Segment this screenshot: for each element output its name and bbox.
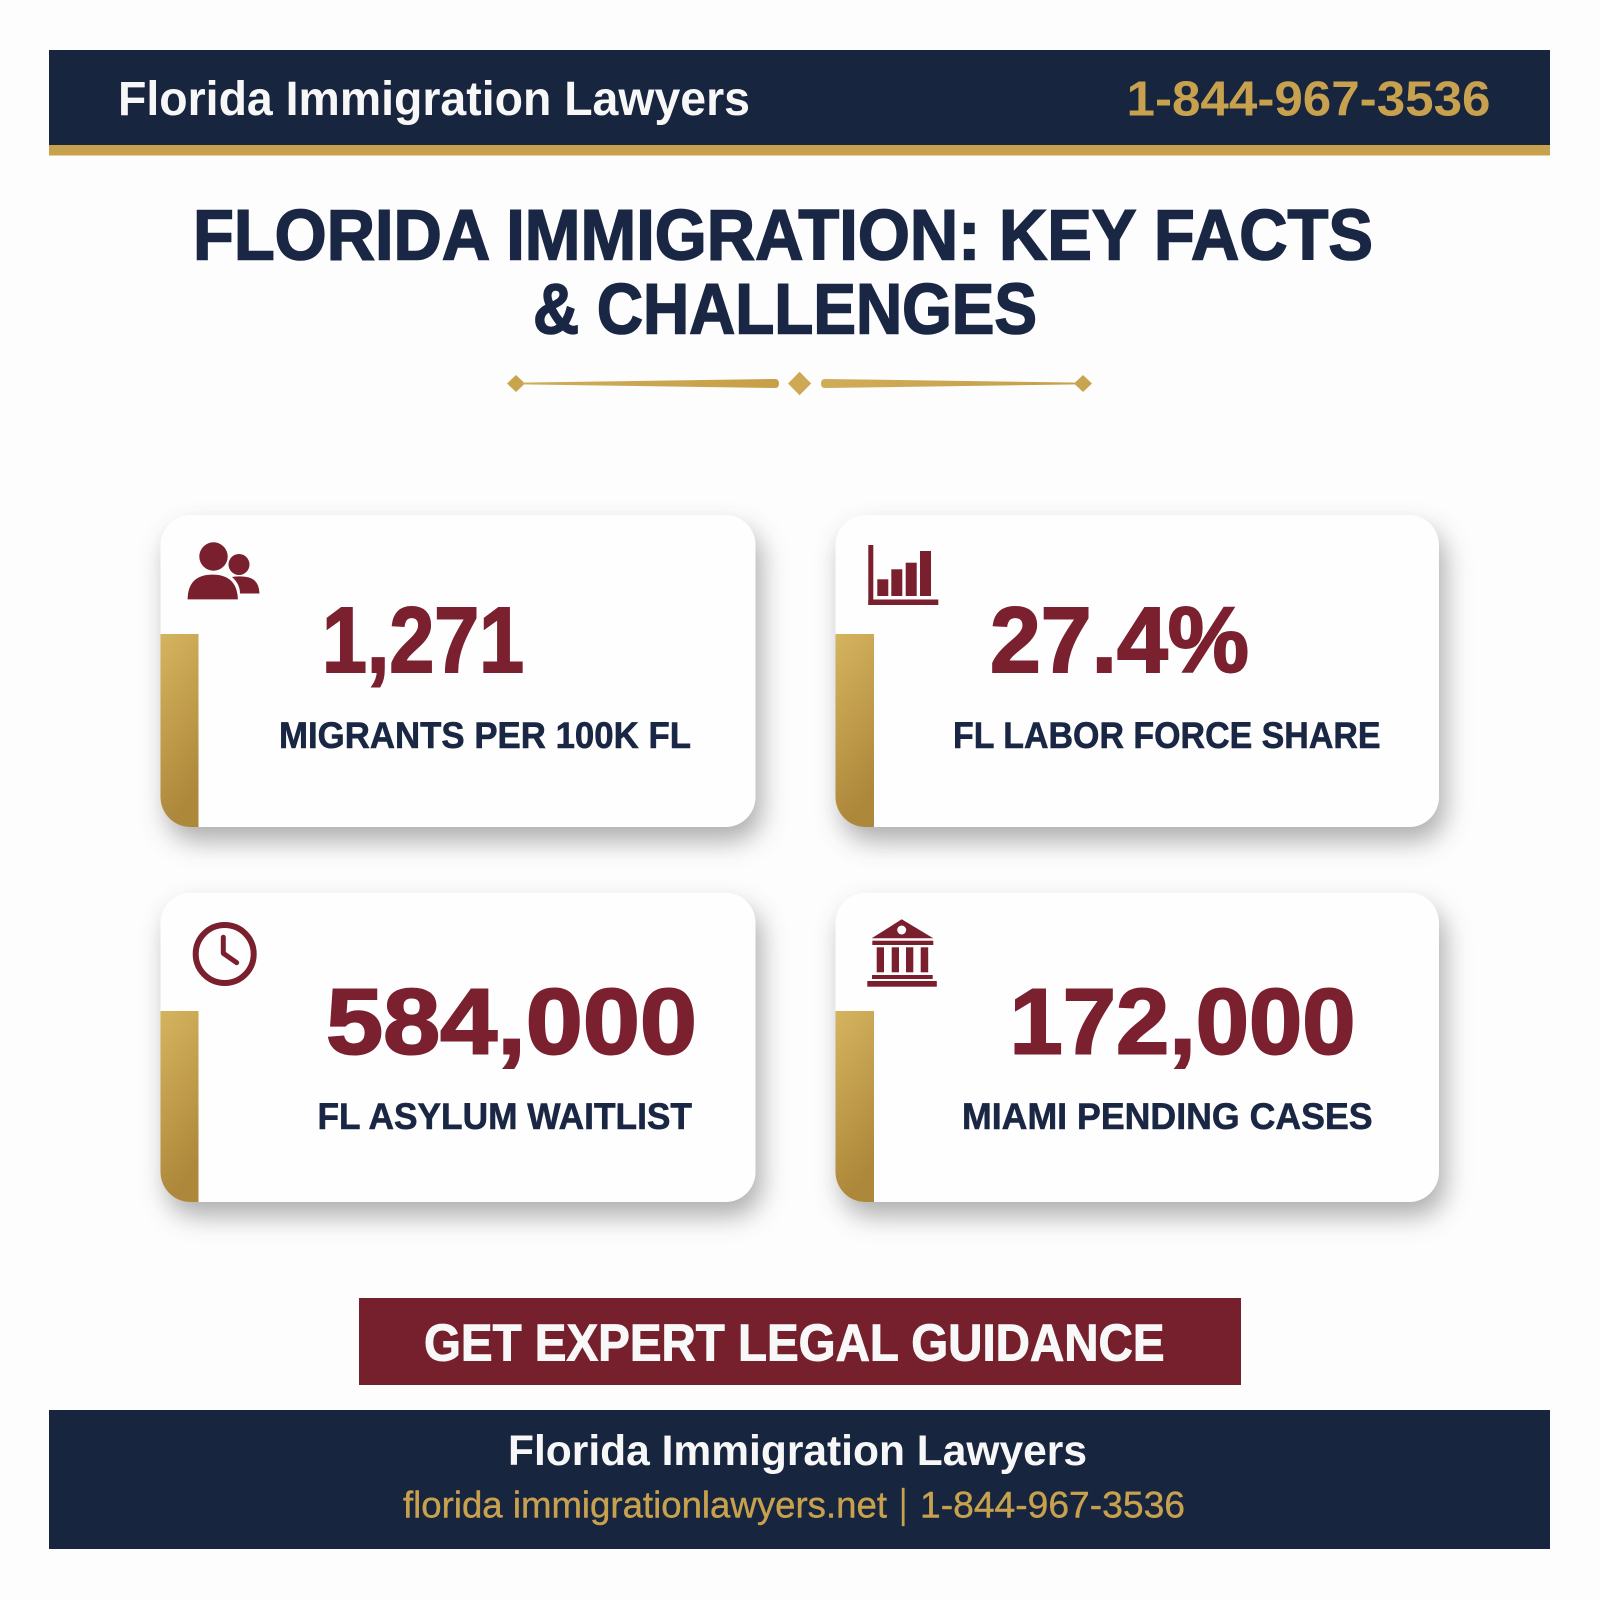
title: [193, 196, 1373, 350]
icon: courthouse: [867, 919, 937, 987]
title: FLORIDA IMMIGRATION: KEY FACTS: [193, 196, 1373, 276]
header firm name: Florida Immigration Lawyers: [118, 73, 750, 126]
footer contact line: 1-844-967-3536: [920, 1484, 1185, 1525]
stat label: FL LABOR FORCE SHARE: [953, 715, 1380, 756]
panel: labor force share: [836, 515, 1439, 827]
icon: bar chart: [868, 545, 938, 605]
stat label: MIGRANTS PER 100K FL: [279, 715, 691, 756]
stat value: 584,000: [326, 970, 697, 1074]
stat label: MIAMI PENDING CASES: [962, 1096, 1373, 1137]
footer bar: [49, 1410, 1550, 1549]
panel: Miami pending cases: [836, 893, 1439, 1202]
title divider ornament: [507, 372, 1092, 395]
title: & CHALLENGES: [533, 270, 1037, 350]
footer contact line: florida immigrationlawyers.net: [403, 1484, 888, 1525]
stat value: 27.4%: [990, 588, 1249, 692]
icon: clock: [196, 925, 254, 983]
icon: people: [187, 542, 260, 600]
header bar: [49, 50, 1550, 156]
panel: migrants per 100K: [160, 515, 756, 827]
call to action banner: GET EXPERT LEGAL GUIDANCE: [424, 1314, 1164, 1372]
footer firm name: Florida Immigration Lawyers: [508, 1427, 1087, 1475]
stat label: FL ASYLUM WAITLIST: [318, 1096, 692, 1137]
header phone number: 1-844-967-3536: [1126, 72, 1490, 126]
footer contact line: [403, 1484, 1185, 1526]
call to action banner: [359, 1298, 1241, 1385]
stat value: 1,271: [322, 588, 524, 692]
panel: asylum waitlist: [160, 893, 756, 1202]
stat value: 172,000: [1010, 970, 1356, 1074]
